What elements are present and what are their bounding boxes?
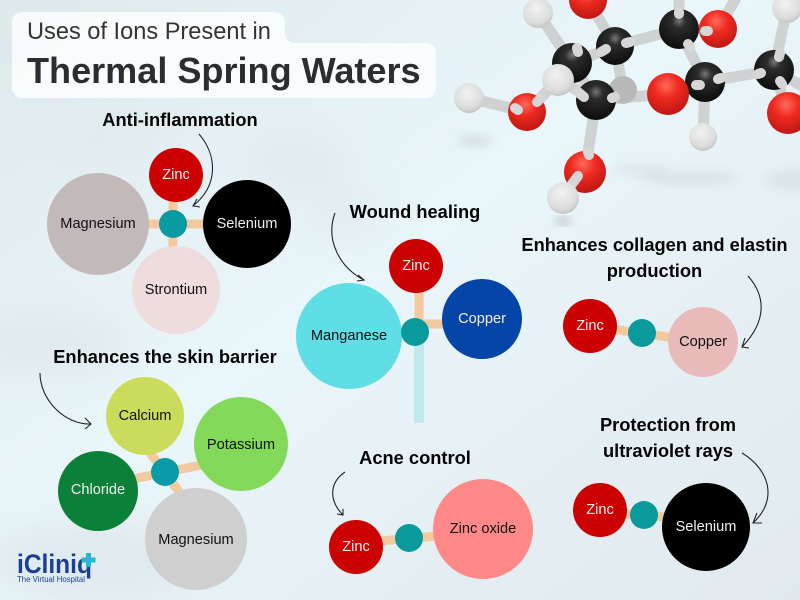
magnesium [47,173,149,275]
magnesium: Magnesium [60,216,136,232]
hub [159,210,187,238]
molecule illustration [454,0,800,224]
zinc [149,148,203,202]
magnesium [145,488,247,590]
hub [401,318,429,346]
title: Uses of Ions Present in [27,19,271,45]
potassium [194,397,288,491]
panel: skin barrier: Enhances the skin barrier [53,346,277,367]
hub [630,501,658,529]
panel: skin barrier [40,346,288,590]
zinc [563,299,617,353]
panel: acne control [329,447,533,579]
selenium: Selenium [217,216,277,232]
selenium: Selenium [676,519,736,535]
panel: ultraviolet protection: Protection from [600,414,736,435]
copper: Copper [458,311,506,327]
zinc [389,239,443,293]
copper [442,279,522,359]
panel: ultraviolet protection [573,414,768,571]
panel: anti-inflammation [47,109,291,334]
logo: iCliniq [17,549,92,579]
copper: Copper [679,334,727,350]
selenium [203,180,291,268]
calcium: Calcium [119,408,171,424]
copper [668,307,738,377]
zinc [329,520,383,574]
hub [395,524,423,552]
zinc: Zinc [576,318,604,334]
panel: collagen and elastin [521,234,788,377]
strontium: Strontium [145,282,207,298]
zinc oxide: Zinc oxide [450,521,516,537]
zinc: Zinc [162,167,190,183]
panel: acne control: Acne control [359,447,471,468]
zinc oxide [433,479,533,579]
panel: ultraviolet protection: ultraviolet rays [603,440,733,461]
strontium [132,246,220,334]
panel: anti-inflammation: Anti-inflammation [102,109,258,130]
chloride: Chloride [71,482,125,498]
zinc: Zinc [402,258,430,274]
potassium: Potassium [207,437,275,453]
chloride [58,451,138,531]
panel: collagen and elastin: Enhances collagen and elastin [521,234,788,255]
panel: wound healing [296,201,522,423]
title: Thermal Spring Waters [27,50,421,91]
magnesium: Magnesium [158,532,234,548]
panel: collagen and elastin: production [607,260,702,281]
panel: wound healing: Wound healing [350,201,480,222]
calcium [106,377,184,455]
manganese [296,283,402,389]
title [12,12,436,98]
selenium [662,483,750,571]
zinc: Zinc [342,539,370,555]
hub [151,458,179,486]
zinc [573,483,627,537]
manganese: Manganese [311,328,387,344]
hub [628,319,656,347]
zinc: Zinc [586,502,614,518]
logo: The Virtual Hospital [17,575,85,584]
